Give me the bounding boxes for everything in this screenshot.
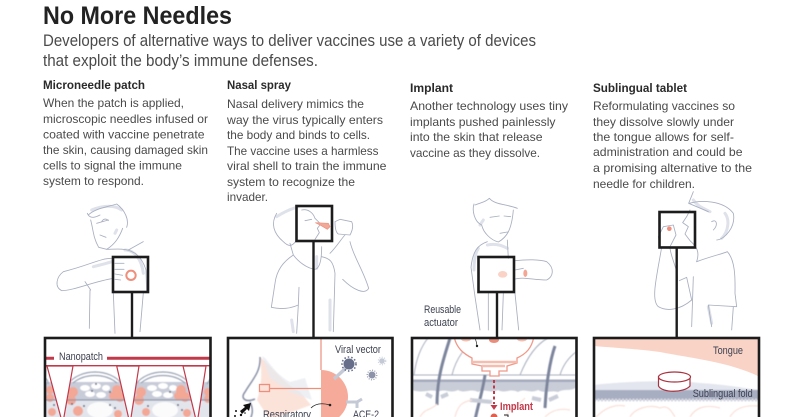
text block: nasal spray description: the body and binds to cells.	[227, 128, 370, 142]
text block: sublingual tablet description: needle for children.	[593, 177, 695, 191]
text block: sublingual tablet description	[593, 99, 752, 191]
heading: nasal spray: Nasal spray	[227, 78, 291, 92]
text block: nasal spray description: way the virus typically enters	[226, 113, 383, 127]
subtitle: that exploit the body’s immune defenses.	[43, 51, 318, 70]
text block: nasal spray description: Nasal delivery mimics the	[227, 97, 364, 111]
label: reusable actuator: Reusable	[424, 304, 461, 316]
heading: sublingual tablet: Sublingual tablet	[593, 81, 687, 95]
text block: microneedle patch description: coated with vaccine penetrate	[43, 128, 205, 142]
label: implant: Implant	[500, 401, 533, 413]
subtitle	[43, 31, 536, 70]
spray droplets	[234, 403, 251, 417]
text block: nasal spray description: invader.	[227, 190, 268, 204]
heading: microneedle patch: Microneedle patch	[43, 78, 145, 92]
text block: microneedle patch description: microscopic needles infused or	[43, 112, 208, 126]
heading: implant: Implant	[410, 81, 453, 95]
text block: nasal spray description: viral shell to train the immune	[227, 159, 387, 173]
label: tongue: Tongue	[713, 345, 743, 357]
tablet	[658, 372, 690, 391]
subtitle: Developers of alternative ways to deliver vaccines use a variety of devices	[43, 31, 536, 50]
needles	[47, 366, 206, 417]
text block: nasal spray description	[226, 97, 387, 204]
skin and hair	[412, 338, 577, 417]
label: reusable actuator	[424, 304, 461, 329]
illustration: person applying patch to arm	[57, 204, 147, 333]
text block: sublingual tablet description: the tongue allows for self-	[593, 130, 734, 144]
callout rectangle	[260, 384, 270, 392]
label: sublingual fold: Sublingual fold	[693, 388, 753, 400]
column text: sublingual tablet	[593, 81, 752, 191]
column text: implant	[410, 81, 568, 160]
column text: nasal spray	[226, 78, 387, 204]
cell	[321, 370, 348, 417]
tongue	[594, 339, 760, 377]
patch backing	[45, 358, 211, 366]
callout frames and connectors	[45, 206, 759, 417]
text block: implant description: into the skin that release	[410, 130, 543, 144]
text block: microneedle patch description	[43, 96, 208, 188]
text block: sublingual tablet description: Reformulating vaccines so	[593, 99, 735, 113]
text block: implant description: Another technology uses tiny	[410, 99, 568, 113]
text block: microneedle patch description: the skin, causing damaged skin	[43, 143, 208, 157]
text block: sublingual tablet description: they dissolve slowly under	[593, 115, 734, 129]
nasal cavity	[243, 356, 312, 417]
label: reusable actuator: actuator	[424, 317, 458, 329]
text block: microneedle patch description: When the patch is applied,	[43, 96, 184, 110]
text block: implant description: vaccine as they dissolve.	[410, 146, 540, 160]
panel: nasal detail	[234, 338, 386, 417]
leader	[475, 339, 478, 345]
text block: nasal spray description: system to recognize the	[227, 175, 355, 189]
illustration: person taking sublingual tablet	[655, 192, 737, 330]
virus particles	[334, 357, 386, 380]
text block: sublingual tablet description: administration and could be	[593, 145, 743, 159]
leader	[311, 404, 330, 408]
text block: sublingual tablet description: a promising alternative to the	[593, 161, 752, 175]
text block: nasal spray description: The vaccine uses a harmless	[227, 144, 378, 158]
panel: sublingual detail	[594, 339, 760, 417]
text block: implant description	[410, 99, 568, 160]
text block: microneedle patch description: cells to signal the immune	[43, 158, 182, 172]
skin layers	[45, 372, 212, 417]
panel: implant detail	[413, 339, 576, 417]
panel: nanopatch detail	[45, 351, 212, 417]
title: No More Needles	[43, 2, 232, 30]
sublingual fold	[594, 381, 760, 417]
implant path	[493, 380, 495, 404]
text block: microneedle patch description: system to respond.	[43, 174, 144, 188]
reusable actuator	[454, 336, 534, 376]
text block: implant description: implants pushed painlessly	[410, 115, 556, 129]
label: viral vector: Viral vector	[335, 344, 381, 356]
column text: microneedle patch	[43, 78, 208, 188]
illustration: person receiving implant	[471, 198, 552, 330]
illustration: person using nasal spray	[271, 207, 369, 333]
ACE-2 receptor	[346, 399, 362, 408]
label: nanopatch: Nanopatch	[59, 351, 103, 363]
